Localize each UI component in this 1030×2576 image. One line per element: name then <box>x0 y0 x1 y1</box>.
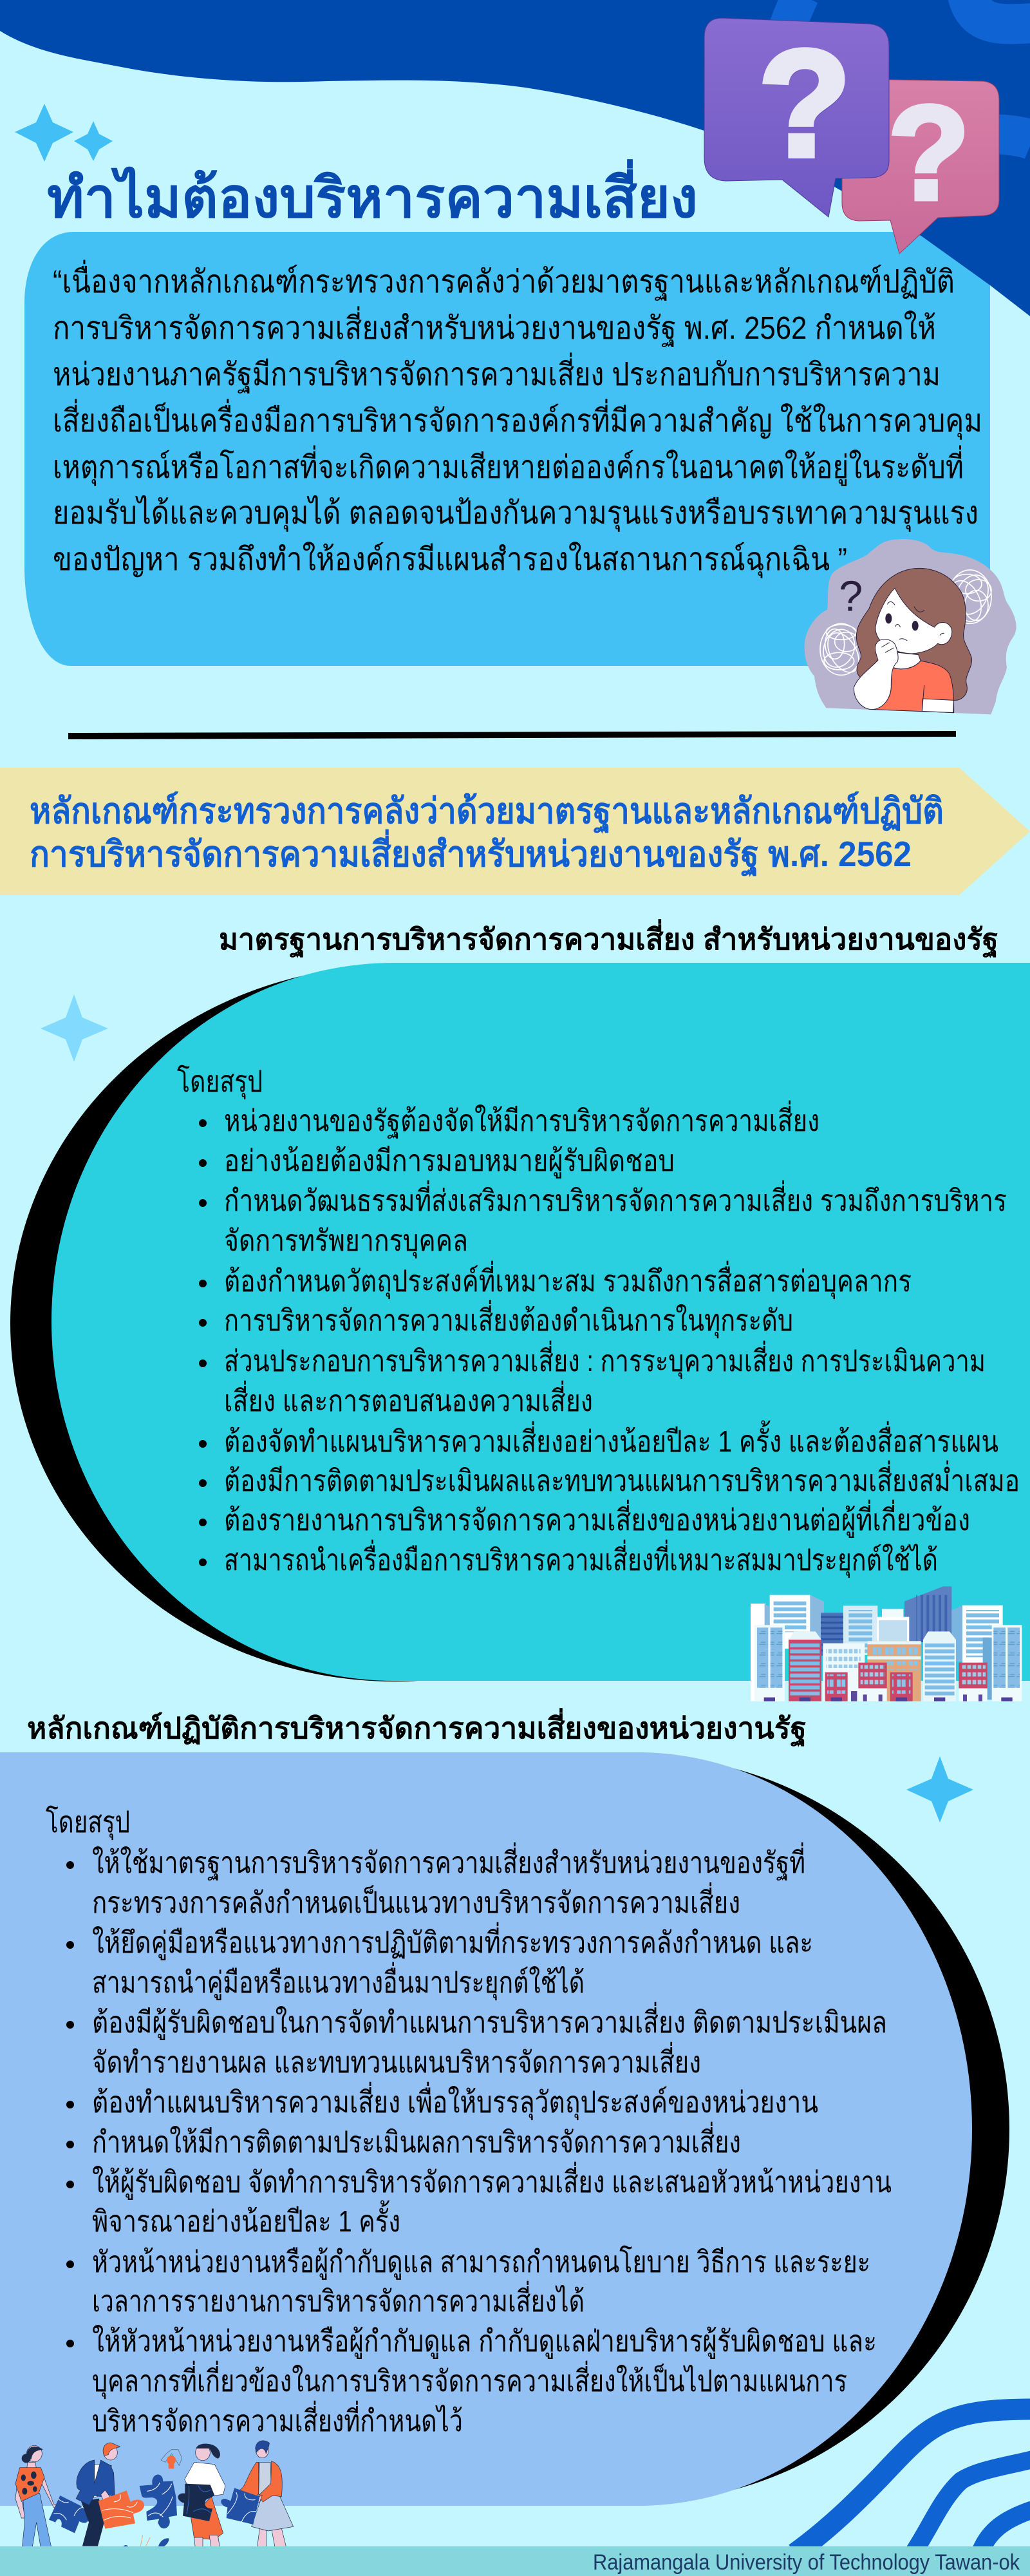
icon: pink question bubble: ? <box>888 79 970 228</box>
icon: sparkles top left <box>15 104 113 162</box>
text: standards list: อย่างน้อยต้องมีการมอบหมายผู้รับผิดชอบ <box>224 1144 675 1179</box>
title: ทำไมต้องบริหารความเสี่ยง <box>47 158 698 229</box>
text: practice list: ให้ผู้รับผิดชอบ จัดทำการบริหารจัดการความเสี่ยง และเสนอหัวหน้าหน่วยงาน <box>92 2161 892 2200</box>
text: standards list <box>177 1065 1020 1578</box>
icon: city buildings <box>751 1586 1022 1701</box>
icon: sparkle right <box>906 1756 973 1823</box>
heading: practice guidelines: หลักเกณฑ์ปฏิบัติการบริหารจัดการความเสี่ยงของหน่วยงานรัฐ <box>27 1708 807 1747</box>
panel: teal standards <box>10 963 1030 1681</box>
person 1 <box>15 2445 66 2548</box>
icon: pink question bubble <box>842 79 999 254</box>
hair <box>856 568 972 700</box>
arm and hand <box>854 639 898 710</box>
banner: การบริหารจัดการความเสี่ยงสำหรับหน่วยงานของรัฐ พ.ศ. 2562 <box>30 829 912 877</box>
text: practice list: โดยสรุป <box>46 1805 130 1841</box>
decorative blue wave bands <box>795 2409 1030 2553</box>
text: standards list: การบริหารจัดการความเสี่ยงต้องดำเนินการในทุกระดับ <box>224 1300 793 1339</box>
puzzle navy <box>178 2484 214 2521</box>
text: practice list: สามารถนำคู่มือหรือแนวทางอื่นมาประยุกต์ใช้ได้ <box>92 1962 585 2001</box>
panel: quote box <box>24 232 990 666</box>
banner <box>0 768 1030 895</box>
neck <box>892 652 921 669</box>
text: practice list: ต้องมีผู้รับผิดชอบในการจัดทำแผนการบริหารความเสี่ยง ติดตามประเมินผล <box>92 2002 887 2040</box>
person 2 <box>76 2443 120 2546</box>
text: practice list: กระทรวงการคลังกำหนดเป็นแนวทางบริหารจัดการความเสี่ยง <box>92 1882 740 1919</box>
puzzle orange <box>98 2490 144 2529</box>
text: practice list: บุคลากรที่เกี่ยวข้องในการบริหารจัดการความเสี่ยงให้เป็นไปตามแผนการ <box>92 2360 847 2400</box>
shirt <box>874 661 954 713</box>
footer strip <box>0 2546 1030 2576</box>
puzzle right blue <box>221 2488 259 2524</box>
plants <box>140 2535 150 2546</box>
quote text: ของปัญหา รวมถึงทำให้องค์กรมีแผนสำรองในสถานการณ์ฉุกเฉิน ” <box>53 542 847 578</box>
text: practice list: กำหนดให้มีการติดตามประเมินผลการบริหารจัดการความเสี่ยง <box>92 2121 741 2159</box>
sleeve cuff <box>922 699 954 713</box>
text: practice list: พิจารณาอย่างน้อยปีละ 1 ครั้ง <box>92 2200 400 2238</box>
banner: หลักเกณฑ์กระทรวงการคลังว่าด้วยมาตรฐานและหลักเกณฑ์ปฏิบัติ <box>30 791 944 834</box>
person 4 <box>239 2441 294 2548</box>
text: practice list <box>46 1805 892 2438</box>
quote text: การบริหารจัดการความเสี่ยงสำหรับหน่วยงานของรัฐ พ.ศ. 2562 กำหนดให้ <box>53 306 936 347</box>
text: practice list: ให้ยึดคู่มือหรือแนวทางการปฏิบัติตามที่กระทรวงการคลังกำหนด และ <box>92 1922 813 1960</box>
puzzle centre blue <box>140 2475 177 2528</box>
text: practice list: เวลาการรายงานการบริหารจัดการความเสี่ยงได้ <box>92 2280 585 2318</box>
quote text <box>53 260 982 578</box>
lightbulb <box>161 2449 182 2468</box>
text: practice list: จัดทำรายงานผล และทบทวนแผนบริหารจัดการความเสี่ยง <box>92 2041 701 2079</box>
text: practice list: ต้องทำแผนบริหารความเสี่ยง เพื่อให้บรรลุวัตถุประสงค์ของหน่วยงาน <box>92 2081 818 2121</box>
icon: purple question bubble: ? <box>758 19 851 189</box>
text: practice list: บริหารจัดการความเสี่ยงที่กำหนดไว้ <box>92 2400 463 2438</box>
puzzle left blue <box>49 2496 89 2533</box>
icon: worried girl: ? <box>839 573 863 620</box>
icon: purple question bubble: ? <box>760 21 853 191</box>
text: practice list: หัวหน้าหน่วยงานหรือผู้กำกับดูแล สามารถกำหนดนโยบาย วิธีการ และระยะ <box>92 2245 870 2280</box>
face <box>876 588 952 654</box>
text: standards list: เสี่ยง และการตอบสนองความเสี่ยง <box>224 1380 593 1417</box>
heading: standards: มาตรฐานการบริหารจัดการความเสี่ยง สำหรับหน่วยงานของรัฐ <box>219 919 998 958</box>
icon: purple question bubble <box>704 18 889 217</box>
divider line <box>68 731 956 739</box>
panel: blue practice <box>0 1752 1009 2506</box>
text: standards list: โดยสรุป <box>177 1065 263 1100</box>
text: standards list: หน่วยงานของรัฐต้องจัดให้มีการบริหารจัดการความเสี่ยง <box>224 1100 819 1139</box>
text: practice list: ให้ใช้มาตรฐานการบริหารจัดการความเสี่ยงสำหรับหน่วยงานของรัฐที่ <box>92 1842 805 1880</box>
facial features <box>885 601 944 641</box>
icon: sparkle left <box>41 994 108 1062</box>
icon: worried girl <box>805 539 1016 714</box>
person 3 <box>185 2444 225 2548</box>
text: practice list: ให้หัวหน้าหน่วยงานหรือผู้กำกับดูแล กำกับดูแลฝ่ายบริหารผู้รับผิดชอบ และ <box>92 2324 877 2359</box>
text: standards list: ต้องกำหนดวัตถุประสงค์ที่เหมาะสม รวมถึงการสื่อสารต่อบุคลากร <box>224 1260 912 1300</box>
icon: team with puzzle pieces <box>15 2441 294 2551</box>
top dark wave with decorative bands <box>0 0 1030 316</box>
text: standards list: จัดการทรัพยากรบุคคล <box>224 1224 468 1259</box>
scribbles <box>818 570 995 677</box>
